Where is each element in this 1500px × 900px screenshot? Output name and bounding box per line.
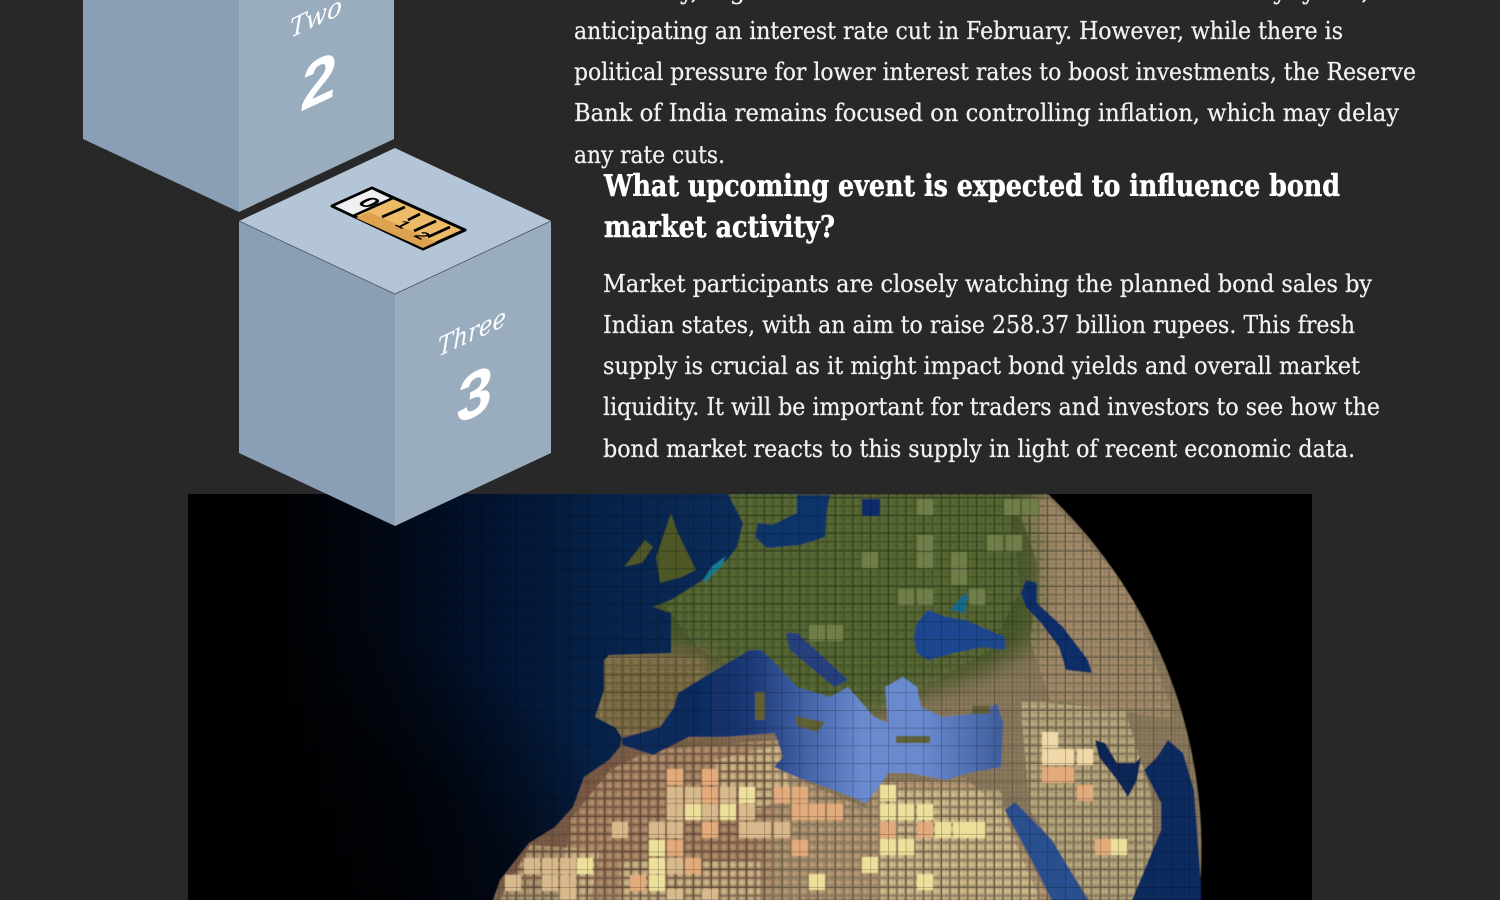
question heading: What upcoming event is expected to influence bond [603, 169, 1340, 204]
North Sea shallows [703, 556, 726, 582]
night shadow on ocean [330, 702, 579, 900]
Sea of Azov [950, 593, 968, 613]
icon: measuring tape [332, 188, 465, 249]
icon: measuring tape: 1 [390, 219, 416, 231]
answer paragraph: liquidity. It will be important for traders and investors to see how the [603, 392, 1380, 421]
Persian Gulf [1095, 740, 1141, 797]
Mediterranean sea [622, 650, 1003, 803]
Adriatic sea [786, 633, 848, 687]
ocean square [862, 499, 880, 516]
cube two [83, 0, 394, 212]
Arabian Sea [1132, 740, 1201, 900]
answer paragraph: Market participants are closely watching the planned bond sales by [603, 269, 1372, 298]
coarse grid [416, 494, 1202, 900]
earth globe image [188, 470, 1312, 900]
top paragraph: Bank of India remains focused on controlling inflation, which may delay [574, 98, 1399, 127]
Baltic Sea [755, 495, 830, 548]
olive cells [809, 499, 1038, 641]
icon: measuring tape: 2 [409, 230, 435, 242]
top paragraph: political pressure for lower interest rates to boost investments, the Reserve [574, 57, 1416, 86]
number 3: 3 [454, 349, 496, 440]
answer paragraph: supply is crucial as it might impact bond yields and overall market [603, 351, 1360, 380]
answer paragraph: Indian states, with an aim to raise 258.37 billion rupees. This fresh [603, 310, 1355, 339]
top paragraph [574, 0, 1416, 169]
question heading [603, 169, 1340, 245]
number 2: 2 [298, 36, 340, 127]
peach cells [630, 767, 1111, 891]
answer paragraph [603, 269, 1380, 463]
top paragraph: any rate cuts. [574, 140, 725, 169]
Caspian Sea [1021, 580, 1092, 673]
top paragraph: anticipating an interest rate cut in February. However, while there is [574, 16, 1343, 45]
label: Three: Three [438, 302, 506, 364]
fine grid over land [493, 494, 1202, 900]
cream cells [1042, 732, 1093, 765]
icon: measuring tape: 0 [351, 194, 387, 211]
ocean [270, 494, 800, 900]
Black Sea [914, 610, 1005, 660]
yellow cells [577, 785, 1127, 891]
cube three [239, 148, 551, 526]
answer paragraph: bond market reacts to this supply in light of recent economic data. [603, 434, 1355, 463]
land masses [480, 470, 1202, 900]
Red Sea [1005, 802, 1088, 900]
Mediterranean islands [755, 692, 990, 743]
question heading: market activity? [604, 210, 835, 245]
tan cells [505, 787, 790, 900]
land cell textures [660, 494, 1020, 720]
